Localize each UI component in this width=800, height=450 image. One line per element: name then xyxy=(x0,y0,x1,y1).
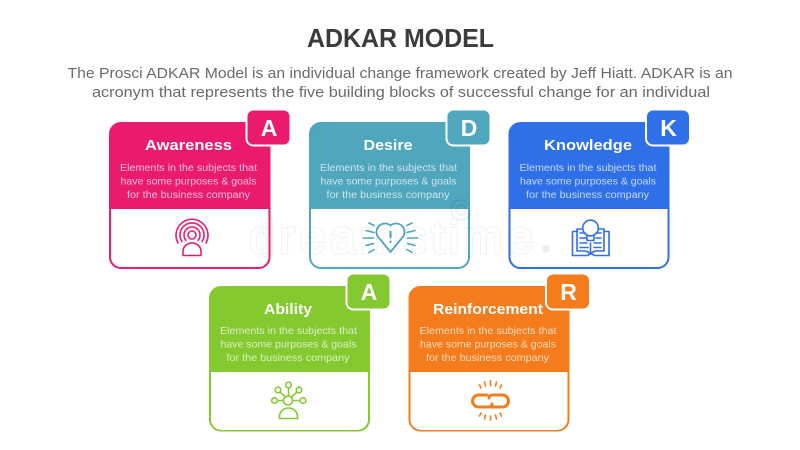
description: Elements in the subjects that xyxy=(520,162,657,174)
icon: open book with bulb xyxy=(572,220,609,256)
description: Elements in the subjects that xyxy=(120,162,257,174)
description xyxy=(420,325,557,364)
badge: D xyxy=(446,110,490,146)
subtitle xyxy=(68,66,732,101)
badge: A xyxy=(346,274,390,310)
badge: A: A xyxy=(261,115,277,141)
panel: Desire xyxy=(310,110,490,268)
icon: chain link xyxy=(472,380,508,420)
heading: Knowledge xyxy=(544,138,632,154)
badge: K xyxy=(646,110,690,146)
description xyxy=(120,162,257,201)
icon: person with network xyxy=(272,382,306,418)
description: Elements in the subjects that xyxy=(420,325,557,337)
description: for the business company xyxy=(127,189,251,201)
badge: A: A xyxy=(361,279,377,305)
badge: K: K xyxy=(660,115,677,141)
subtitle: The Prosci ADKAR Model is an individual change framework created by Jeff Hiatt. ADKAR is an xyxy=(68,66,732,82)
description: have some purposes & goals xyxy=(220,338,356,350)
icon: broadcast person xyxy=(176,219,208,256)
badge: R xyxy=(546,274,590,310)
description xyxy=(320,162,457,201)
panel: Ability xyxy=(210,274,390,430)
badge: D: D xyxy=(461,115,477,141)
description: have some purposes & goals xyxy=(420,338,556,350)
description: Elements in the subjects that xyxy=(220,325,357,337)
heading: Awareness xyxy=(145,138,232,154)
panel: Reinforcement xyxy=(410,274,590,430)
heading: Reinforcement xyxy=(433,302,543,318)
description: for the business company xyxy=(226,352,350,364)
description: have some purposes & goals xyxy=(320,176,456,188)
description: have some purposes & goals xyxy=(520,176,656,188)
heading: Ability xyxy=(264,302,312,318)
description xyxy=(520,162,657,201)
panel: Knowledge xyxy=(510,110,690,268)
icon: heart with alert xyxy=(364,223,418,252)
description xyxy=(220,325,357,364)
description: for the business company xyxy=(426,352,550,364)
watermark: dreamstime xyxy=(249,211,533,263)
badge: R: R xyxy=(560,279,577,305)
description: Elements in the subjects that xyxy=(320,162,457,174)
badge: A xyxy=(246,110,290,146)
description: for the business company xyxy=(526,189,650,201)
title: ADKAR MODEL xyxy=(307,23,494,53)
watermark xyxy=(250,200,550,255)
subtitle: acronym that represents the five building blocks of successful change for an individual xyxy=(92,85,710,101)
panel: Awareness xyxy=(110,110,290,268)
heading: Desire xyxy=(364,138,412,154)
description: have some purposes & goals xyxy=(120,176,256,188)
description: for the business company xyxy=(326,189,450,201)
